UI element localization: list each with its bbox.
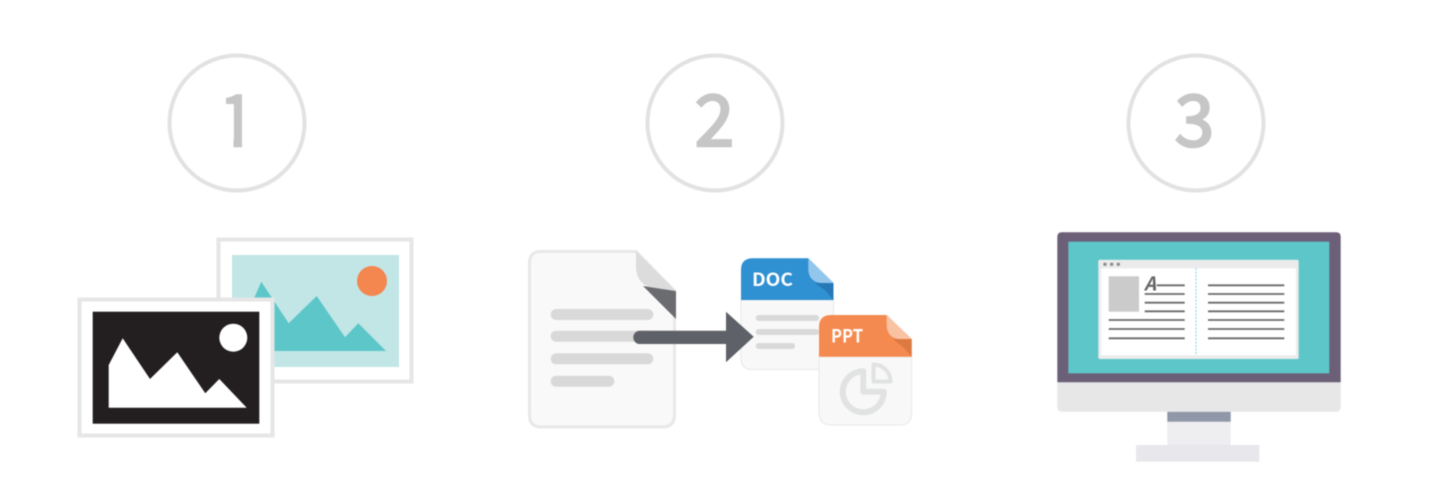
back colour photo — [218, 240, 412, 382]
step 3 number badge: 3 — [1175, 65, 1214, 167]
icon: DOC file — [741, 258, 834, 370]
infographic canvas — [78, 53, 1342, 462]
icon: PPT file — [819, 315, 912, 425]
monitor screen — [1068, 242, 1329, 373]
monitor chin — [1057, 382, 1341, 412]
step 1 number badge — [170, 56, 304, 190]
column divider — [1195, 268, 1197, 354]
DOC text lines — [756, 315, 819, 349]
icon: desktop monitor — [1057, 232, 1341, 462]
browser window — [1098, 260, 1299, 359]
step 2 number badge: 2 — [695, 65, 734, 167]
window control dots — [1103, 263, 1120, 266]
document text lines — [551, 309, 653, 387]
monitor stand — [1136, 412, 1259, 462]
fold — [887, 315, 912, 357]
arrow — [633, 312, 754, 362]
drop cap: A — [1143, 270, 1157, 296]
PPT label: PPT — [831, 322, 863, 348]
left column text lines — [1109, 285, 1185, 338]
page fold — [636, 251, 676, 319]
icon: source document — [530, 251, 676, 427]
step 3 number badge — [1128, 56, 1264, 190]
DOC label: DOC — [752, 266, 793, 292]
pie chart glyph — [843, 364, 890, 412]
fold — [808, 258, 834, 300]
image placeholder — [1109, 276, 1139, 312]
step 1 number badge: 1 — [217, 65, 257, 167]
front black and white photo — [80, 300, 272, 436]
step 2 number badge — [648, 56, 782, 190]
icon: two photos — [80, 240, 412, 436]
monitor bezel — [1057, 232, 1341, 382]
right column text lines — [1208, 285, 1284, 338]
